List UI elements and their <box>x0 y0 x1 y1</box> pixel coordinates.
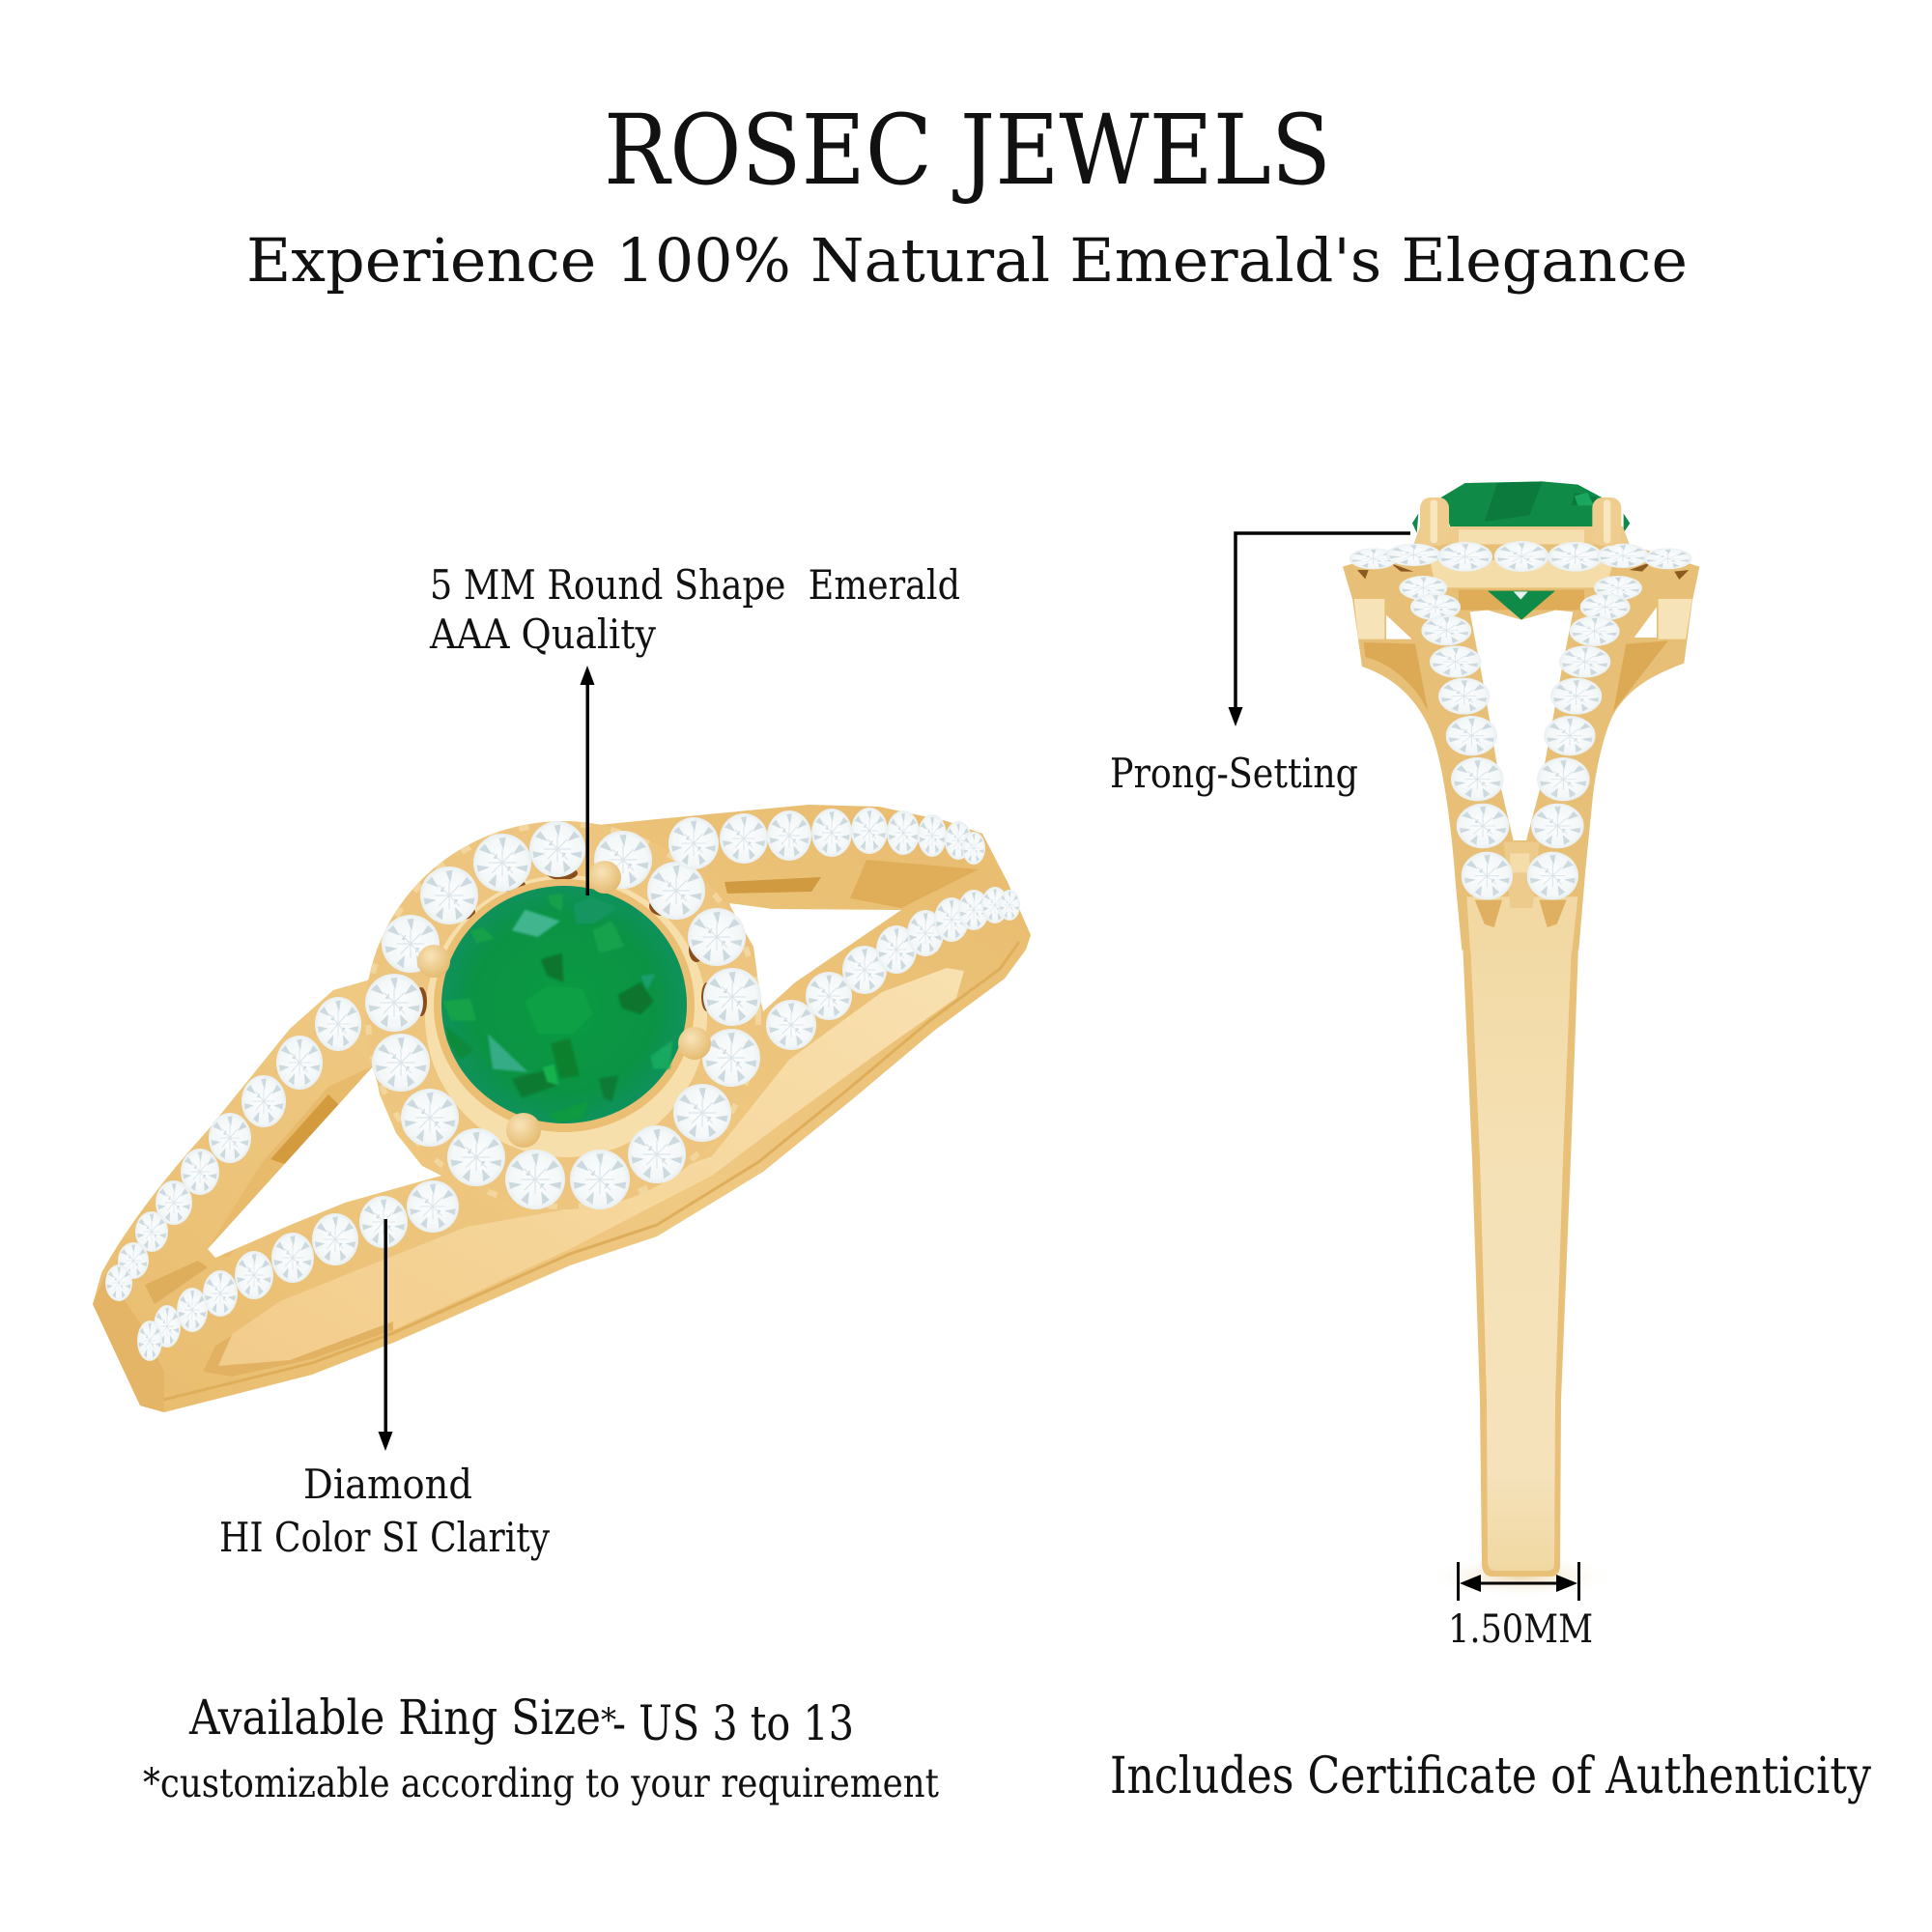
side curved shading <box>1364 640 1668 712</box>
emerald crown <box>1441 481 1602 528</box>
top gallery shade <box>850 860 979 908</box>
left gallery window <box>270 1094 340 1164</box>
right white gap <box>729 903 901 1011</box>
label: emerald: 5 MM Round Shape Emerald <box>430 561 960 609</box>
left front face shade <box>93 1273 164 1412</box>
band diamonds upper left <box>105 997 361 1301</box>
side windows <box>1386 607 1657 639</box>
lower junction shade <box>145 1261 208 1304</box>
ring side view <box>1343 481 1699 1598</box>
emerald <box>441 886 687 1123</box>
halo diamonds <box>365 821 761 1209</box>
lower bar <box>1459 590 1584 610</box>
inner band surface <box>203 968 964 1377</box>
emerald prongs <box>417 861 711 1148</box>
label: band width: 1.50MM <box>1448 1607 1593 1652</box>
emerald pavilion <box>1488 591 1555 620</box>
ring size note: - US 3 to 13 <box>612 1695 854 1751</box>
ring size note: * <box>601 1701 616 1740</box>
outer rim line <box>159 942 1019 1401</box>
white split gap <box>1470 611 1573 840</box>
pavilion highlight <box>1514 591 1528 600</box>
halo diamonds row <box>1350 541 1692 572</box>
title: ROSEC JEWELS <box>604 94 1331 207</box>
ring body <box>93 805 1031 1412</box>
arrow: diamond <box>379 1219 392 1451</box>
prongs <box>1420 497 1621 546</box>
soft ground shadow <box>1424 1555 1617 1598</box>
side lobes <box>1354 599 1692 639</box>
side pockets <box>1357 562 1689 580</box>
label: diamond <box>219 1461 550 1561</box>
emerald gold rim <box>434 879 695 1132</box>
inner band opening shadow <box>203 1321 393 1377</box>
setting arches <box>1475 900 1567 927</box>
label: diamond: HI Color SI Clarity <box>219 1514 550 1561</box>
arrow: prong <box>1229 533 1410 726</box>
shank bridge <box>1504 842 1539 908</box>
label: emerald <box>429 561 960 658</box>
left shank underside <box>208 1065 374 1258</box>
ring size note <box>188 1690 854 1751</box>
bridge pale <box>1510 853 1529 872</box>
split shank diamonds <box>1399 576 1642 900</box>
prong highlights <box>1431 499 1610 543</box>
arrow: emerald <box>580 666 595 895</box>
collar <box>1413 526 1630 567</box>
central pocket band <box>1430 560 1613 587</box>
subtitle: Experience 100% Natural Emerald's Elegance <box>246 225 1688 296</box>
halo setting <box>365 821 761 1209</box>
stone pockets <box>415 867 713 1016</box>
band diamonds lower right <box>766 887 1020 1050</box>
halo beading <box>368 824 758 1207</box>
emerald side tips <box>1412 514 1630 533</box>
upper setting <box>1343 481 1699 952</box>
ring front view <box>93 805 1031 1412</box>
left white gap <box>208 1065 441 1258</box>
lower shank face <box>1469 918 1573 1571</box>
band diamonds upper right <box>668 808 985 869</box>
label: emerald: AAA Quality <box>429 611 656 658</box>
shank top face <box>1466 896 1577 952</box>
setting body <box>1343 544 1699 950</box>
top gallery window <box>724 877 821 894</box>
ring size note: Available Ring Size <box>188 1690 601 1746</box>
emerald facets <box>1485 481 1597 522</box>
dimension arrow <box>1457 1562 1580 1601</box>
collar highlight <box>1459 529 1584 546</box>
customization note: *customizable according to your requirement <box>143 1760 939 1806</box>
lower shank <box>1462 918 1579 1577</box>
label: prong setting: Prong-Setting <box>1110 750 1358 797</box>
band diamonds lower left <box>137 1180 459 1361</box>
label: diamond: Diamond <box>303 1461 472 1508</box>
emerald seat pale <box>425 875 707 1157</box>
